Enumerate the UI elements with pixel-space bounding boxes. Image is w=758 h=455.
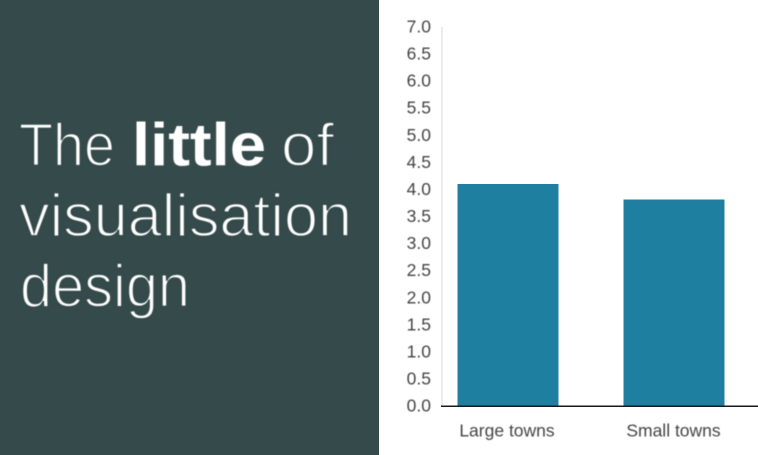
y axis labels: 0.5: [407, 368, 431, 388]
title: visualisation: [19, 182, 352, 249]
title: little: [132, 112, 266, 178]
x label: Small towns: Small towns: [626, 420, 721, 440]
y axis labels: [407, 16, 431, 416]
y axis labels: 6.5: [407, 44, 431, 64]
bar: Small towns: [624, 200, 724, 406]
y axis line: [442, 27, 443, 406]
y axis labels: 3.5: [407, 206, 431, 226]
title: design: [20, 252, 190, 320]
y axis labels: 2.0: [407, 288, 431, 308]
y axis labels: 3.0: [407, 233, 431, 253]
y axis labels: 2.5: [407, 260, 431, 280]
bar chart: [407, 16, 758, 440]
y axis labels: 5.0: [407, 125, 431, 145]
x label: Large towns: Large towns: [459, 420, 555, 440]
y axis labels: 1.5: [407, 314, 431, 334]
title: of: [281, 112, 334, 178]
x axis baseline: [441, 406, 758, 407]
y axis labels: 1.0: [407, 342, 431, 362]
y axis labels: 4.0: [407, 179, 431, 199]
y axis labels: 7.0: [407, 16, 431, 36]
y axis labels: 5.5: [407, 98, 431, 118]
bar: Large towns: [458, 184, 558, 406]
title: [19, 112, 352, 320]
y axis labels: 4.5: [407, 152, 431, 172]
title: The: [19, 112, 115, 178]
y axis labels: 6.0: [407, 70, 431, 90]
panel: title background: [0, 0, 379, 455]
y axis labels: 0.0: [407, 396, 431, 416]
